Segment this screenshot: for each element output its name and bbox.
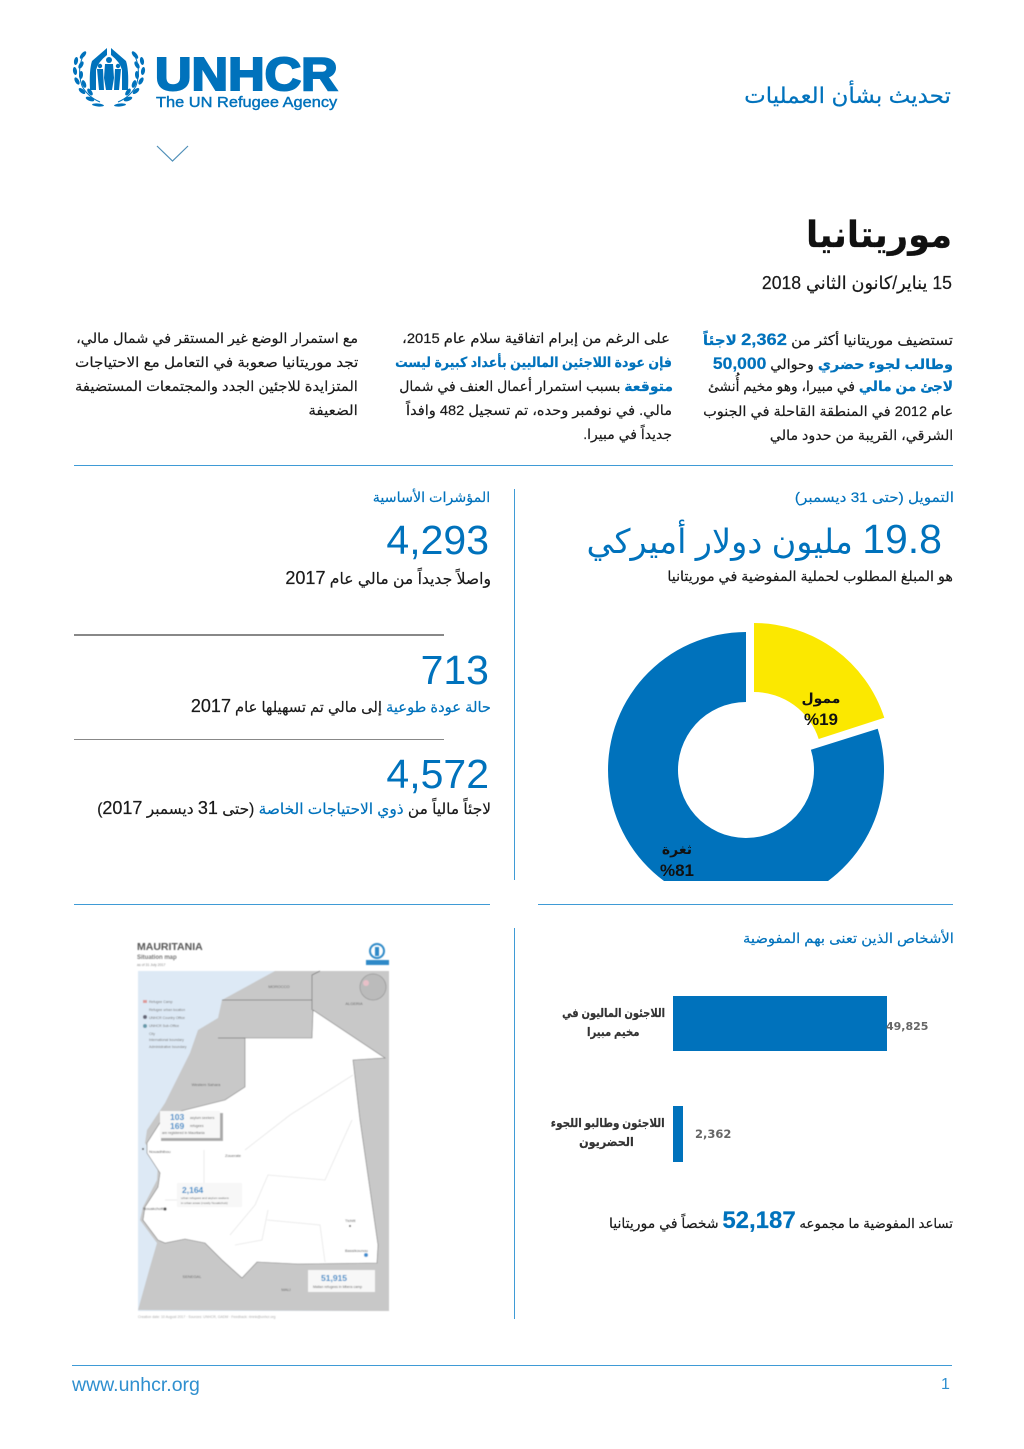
map logo bbox=[366, 944, 389, 965]
map callout: asylum seekers: asylum seekers bbox=[190, 1116, 215, 1120]
donut label: gap: ثغرة bbox=[662, 841, 692, 857]
indicator: new arrivals: واصلاً جديداً من مالي عام 2017 bbox=[285, 568, 491, 588]
intro text column 2: مالي. في نوفمبر وحده، تم تسجيل 482 وافداً bbox=[406, 402, 672, 418]
icon: UNHCR emblem bbox=[72, 48, 146, 107]
map: places bbox=[142, 1148, 368, 1257]
intro text column 3: مع استمرار الوضع غير المستقر في شمال مالي، bbox=[76, 330, 358, 346]
indicator: voluntary returns bbox=[191, 647, 491, 716]
map: neighbouring countries bbox=[138, 971, 389, 1311]
map legend: Administrative boundary bbox=[149, 1045, 187, 1049]
map legend: UNHCR Sub-Office bbox=[149, 1024, 179, 1028]
intro text column 2: فإن عودة اللاجئين الماليين بأعداد كبيرة ليست bbox=[395, 354, 672, 370]
intro text column 1 bbox=[703, 330, 953, 444]
map legend: International boundary bbox=[149, 1038, 184, 1042]
logo tagline: The UN Refugee Agency bbox=[156, 95, 337, 111]
donut label: funded: ممول bbox=[802, 690, 840, 706]
map callout: urban refugees: 2,164 bbox=[182, 1185, 204, 1195]
map legend: City bbox=[149, 1032, 155, 1036]
map callout: urban refugees: in urban areas (mostly Nouakchott) bbox=[181, 1201, 228, 1205]
map callout: asylum seekers: are registered in Mauritania bbox=[162, 1131, 205, 1135]
panel: people of concern bbox=[551, 929, 954, 1234]
indicator: voluntary returns: 713 bbox=[421, 647, 489, 693]
indicator: specific needs bbox=[97, 751, 491, 818]
map: Western Sahara label: Western Sahara bbox=[192, 1082, 221, 1087]
panel: situation map: as of 31 July 2017 bbox=[137, 963, 165, 967]
intro text column 1: عام 2012 في المنطقة القاحلة في الجنوب bbox=[703, 403, 953, 419]
map callout: urban refugees bbox=[177, 1183, 242, 1207]
panel: situation map: Situation map bbox=[137, 955, 177, 961]
panel: situation map bbox=[136, 941, 390, 1320]
intro text column 3: تجد موريتانيا صعوبة في التعامل مع الاحتياجات bbox=[75, 354, 358, 370]
map callout: Mbera camp bbox=[308, 1270, 375, 1292]
heading: people of concern: الأشخاص الذين تعنى بهم المفوضية bbox=[743, 930, 954, 946]
intro text column 3: الضعيفة bbox=[308, 402, 358, 418]
indicator: voluntary returns: حالة عودة طوعية إلى مالي تم تسهيلها عام 2017 bbox=[191, 696, 491, 716]
bar value: 2,362: 2,362 bbox=[695, 1127, 731, 1141]
icon: chevron bbox=[156, 146, 188, 162]
indicator: specific needs: لاجئاً مالياً من ذوي الاحتياجات الخاصة (حتى 31 ديسمبر 2017) bbox=[97, 798, 491, 818]
map callout: asylum seekers bbox=[160, 1111, 223, 1141]
intro text column 1: وطالب لجوء حضري وحوالي 50,000 bbox=[713, 354, 953, 373]
total people assisted: تساعد المفوضية ما مجموعه 52,187 شخصاً في موريتانيا bbox=[609, 1207, 953, 1234]
map legend: Refugee urban location bbox=[149, 1008, 185, 1012]
map globe inset bbox=[360, 974, 386, 1000]
intro text column 1: الشرقي، القريبة من حدود مالي bbox=[770, 427, 953, 443]
map legend bbox=[143, 1000, 187, 1049]
intro text column 2: على الرغم من إبرام اتفاقية سلام عام 2015، bbox=[402, 330, 670, 346]
donut label: gap: %81 bbox=[660, 861, 694, 880]
intro text column 3 bbox=[75, 330, 358, 418]
intro text column 2 bbox=[395, 330, 673, 443]
map legend: Refugee Camp bbox=[149, 1000, 173, 1004]
intro text column 2: جديداً في مبيرا. bbox=[583, 426, 672, 442]
panel: key indicators bbox=[74, 488, 491, 818]
bar label: Malian refugees: اللاجئون الماليون في bbox=[562, 1006, 665, 1020]
map background: sea bbox=[138, 971, 389, 1311]
indicator: new arrivals: 4,293 bbox=[386, 517, 489, 563]
footer URL: www.unhcr.org bbox=[72, 1374, 200, 1396]
page number: 1 bbox=[941, 1376, 950, 1393]
map callout: Mbera camp: 51,915 bbox=[321, 1273, 347, 1283]
map: places: Tichitt bbox=[345, 1218, 356, 1223]
panel: situation map: MOROCCO bbox=[268, 984, 290, 989]
indicator: specific needs: 4,572 bbox=[386, 751, 489, 797]
map callout: urban refugees: urban refugees and asylum seekers bbox=[181, 1196, 229, 1200]
panel: funding bbox=[586, 489, 954, 585]
donut label: funded: %19 bbox=[804, 710, 838, 729]
map callout: asylum seekers: 169 bbox=[170, 1121, 184, 1131]
bar value: 49,825: 49,825 bbox=[886, 1020, 928, 1033]
map callout: asylum seekers: refugees bbox=[190, 1124, 204, 1128]
donut segment: funded bbox=[754, 623, 884, 739]
date: 15 يناير/كانون الثاني 2018 bbox=[762, 273, 952, 293]
panel: situation map: ALGERIA bbox=[345, 1001, 363, 1006]
panel: situation map: SENEGAL bbox=[183, 1274, 202, 1279]
map: places: Bassikounou bbox=[345, 1248, 368, 1253]
map: places: Nouakchott bbox=[143, 1206, 164, 1211]
panel: situation map: MALI bbox=[281, 1287, 291, 1292]
donut chart: funded vs gap bbox=[608, 623, 884, 881]
intro text column 2: متوقعة بسبب استمرار أعمال العنف في شمال bbox=[399, 378, 673, 394]
bar: Malian refugees bbox=[673, 996, 887, 1051]
map legend: UNHCR Country Office bbox=[149, 1016, 185, 1020]
donut label: gap bbox=[660, 841, 694, 880]
document type heading: تحديث بشأن العمليات bbox=[744, 83, 951, 108]
country title: موريتانيا bbox=[806, 214, 952, 255]
map: places: Zouerate bbox=[225, 1153, 242, 1158]
map callout: asylum seekers: 103 bbox=[170, 1112, 184, 1122]
heading: key indicators: المؤشرات الأساسية bbox=[372, 489, 490, 505]
intro text column 1: تستضيف موريتانيا أكثر من 2,362 لاجئاً bbox=[703, 330, 953, 349]
indicator: new arrivals bbox=[285, 517, 491, 588]
map callout: Mbera camp: Malian refugees in Mbera camp bbox=[313, 1285, 362, 1289]
map: Mauritania bbox=[143, 1010, 385, 1278]
logo wordmark: UNHCR bbox=[155, 48, 338, 100]
bar chart: people of concern: مخيم مبيرا bbox=[587, 1025, 640, 1039]
intro text column 3: المتزايدة للاجئين الجدد والمجتمعات المستضيفة bbox=[75, 378, 358, 394]
bar label: urban refugees: اللاجئون وطالبو اللجوء bbox=[551, 1116, 665, 1130]
bar: urban refugees bbox=[673, 1106, 683, 1162]
panel: situation map: Creation date: 10 August 2017 · Sources: UNHCR, GADM · Feedback: rimnk@unhcr.org bbox=[138, 1315, 275, 1319]
donut segment: gap bbox=[608, 632, 884, 908]
map: places: Nouadhibou bbox=[149, 1149, 171, 1154]
bar chart: people of concern: الحضريون bbox=[579, 1135, 634, 1149]
intro text column 1: لاجئ من مالي في مبيرا، وهو مخيم أُنشئ bbox=[708, 378, 953, 394]
map heading: MAURITANIA bbox=[137, 941, 203, 953]
donut label: funded bbox=[802, 690, 840, 729]
funding total: 19.8 مليون دولار أميركي bbox=[586, 516, 942, 562]
map: borders bbox=[218, 971, 320, 1038]
UNHCR logo bbox=[72, 48, 338, 111]
funding description: هو المبلغ المطلوب لحملية المفوضية في موريتانيا bbox=[668, 568, 953, 584]
bar chart: people of concern bbox=[551, 996, 928, 1162]
heading: funding: التمويل (حتى 31 ديسمبر) bbox=[795, 489, 954, 505]
